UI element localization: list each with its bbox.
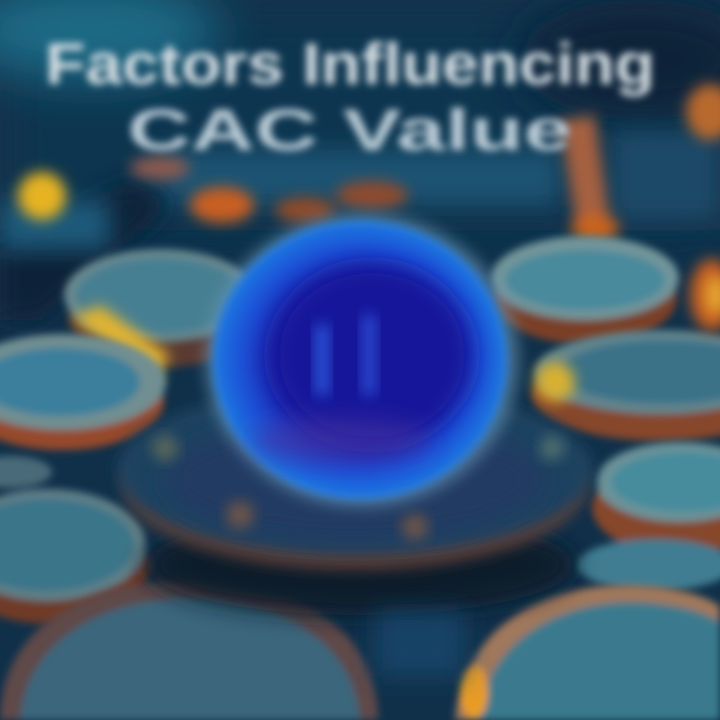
coin: bottom left (0, 580, 378, 720)
coin: yellow edge right (535, 362, 575, 402)
coin: right lower (577, 442, 720, 591)
coin: right middle (532, 330, 720, 441)
coin: upper right (491, 236, 679, 344)
coin: bottom right (455, 585, 720, 720)
blue sphere with glyph (204, 212, 520, 508)
warm accents behind the coins (18, 84, 720, 242)
title (45, 32, 655, 163)
title: CAC Value (128, 98, 572, 163)
coin: upper left (64, 249, 261, 367)
coin: yellow edge left (72, 305, 170, 380)
coin: far right orange edge (690, 259, 720, 331)
title: Factors Influencing (45, 32, 655, 97)
coin: left middle (0, 334, 166, 450)
coin: lower left (0, 456, 150, 624)
shadow and centre pedestal coin (117, 386, 593, 677)
